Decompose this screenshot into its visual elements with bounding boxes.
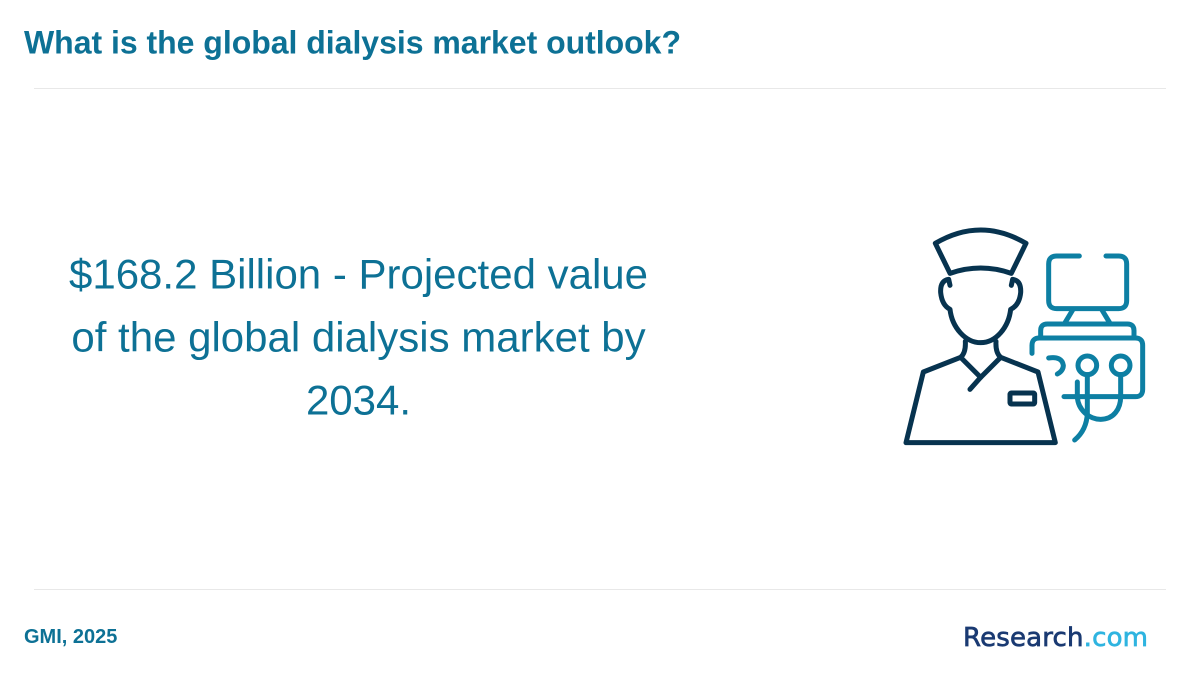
main statement: [69, 250, 648, 424]
source label: GMI, 2025: [24, 626, 117, 648]
icon: medical professional with dialysis machine: [906, 230, 1143, 443]
logo: Research.com: Research.com: [963, 623, 1148, 653]
main statement: 2034.: [306, 376, 411, 424]
main statement: of the global dialysis market by: [71, 314, 646, 360]
icon: nurse figure: [906, 230, 1055, 443]
main statement: $168.2 Billion - Projected value: [69, 250, 648, 298]
title: What is the global dialysis market outlook?: [24, 24, 681, 60]
icon: dialysis machine: [1032, 256, 1143, 440]
